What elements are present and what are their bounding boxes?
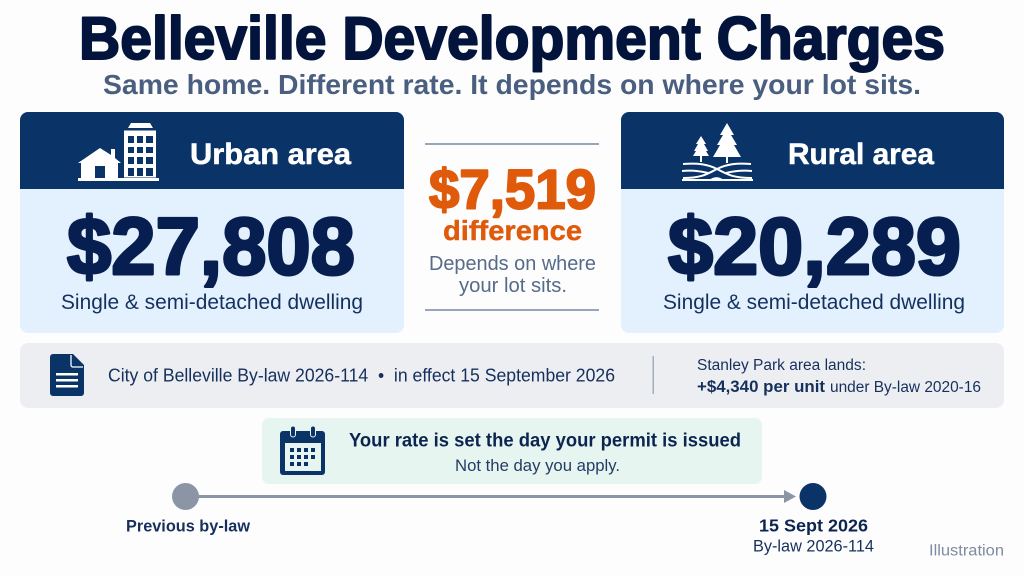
by-law text: City of Belleville By-law 2026-114 • in effect 15 September 2026 — [108, 366, 615, 386]
urban dwelling label: Single & semi-detached dwelling — [61, 291, 363, 314]
callout: permit rate — [262, 418, 762, 484]
Stanley Park note — [697, 357, 981, 396]
icon: trees and fields — [682, 123, 753, 181]
timeline — [126, 483, 874, 556]
label: new date: 15 Sept 2026 — [759, 516, 868, 536]
panel: urban area — [20, 112, 404, 333]
icon: document — [50, 354, 84, 396]
subtitle: Same home. Different rate. It depends on where your lot sits. — [103, 69, 921, 100]
callout note: Not the day you apply. — [455, 456, 620, 475]
difference label: difference — [443, 215, 582, 246]
panel heading: Urban area — [190, 138, 351, 171]
panel: difference — [425, 143, 602, 311]
rural amount: $20,289 — [668, 202, 961, 292]
difference amount: $7,519 — [429, 158, 596, 220]
illustration note: Illustration — [929, 542, 1004, 560]
icon: house and tower — [78, 123, 159, 181]
marker: previous by-law — [172, 483, 199, 510]
label: new by-law: By-law 2026-114 — [753, 538, 874, 556]
label: previous by-law: Previous by-law — [126, 518, 250, 536]
Stanley Park note: +$4,340 per unit — [697, 378, 826, 396]
panel: by-law bar — [20, 343, 1004, 408]
marker: new by-law — [800, 483, 826, 510]
difference note: your lot sits. — [459, 275, 567, 297]
callout heading: Your rate is set the day your permit is issued — [349, 430, 741, 452]
urban amount: $27,808 — [67, 202, 355, 292]
Stanley Park note: under By-law 2020-16 — [830, 379, 981, 396]
title: Belleville Development Charges — [79, 5, 945, 72]
panel: rural area — [621, 112, 1004, 333]
rural dwelling label: Single & semi-detached dwelling — [663, 291, 965, 314]
Stanley Park note: Stanley Park area lands: — [697, 357, 866, 374]
icon: calendar — [280, 426, 325, 475]
panel heading: Rural area — [788, 138, 934, 171]
difference note: Depends on where — [429, 253, 596, 275]
arrow — [198, 490, 796, 503]
